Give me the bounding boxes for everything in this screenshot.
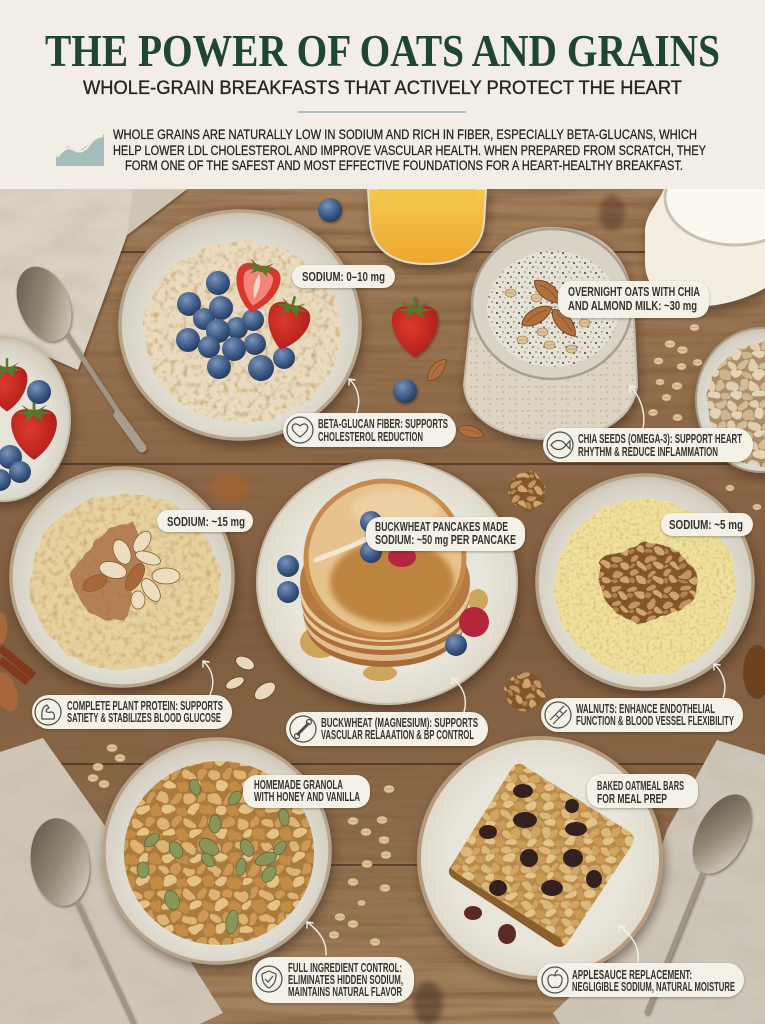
pancake plate bbox=[257, 460, 517, 704]
icon: apple bbox=[542, 967, 568, 993]
callout: baked oatmeal bars bbox=[587, 774, 698, 808]
icon: shield bbox=[256, 966, 282, 992]
callout: homemade granola: WITH HONEY AND VANILLA bbox=[254, 790, 360, 804]
callout: overnight oats: OVERNIGHT OATS WITH CHIA bbox=[568, 285, 700, 299]
callout: beta-glucan: BETA-GLUCAN FIBER: SUPPORTS bbox=[318, 417, 448, 431]
bowl: quinoa with cinnamon and almonds bbox=[11, 468, 233, 686]
callout: sodium porridge: SODIUM: ~5 mg bbox=[669, 518, 743, 532]
bowl: homemade granola bbox=[104, 739, 330, 963]
callout: homemade granola: HOMEMADE GRANOLA bbox=[254, 778, 343, 792]
syrup pools bbox=[300, 589, 488, 681]
callout: full ingredient control: ELIMINATES HIDDEN SODIUM, bbox=[288, 973, 403, 987]
jar: overnight oats with chia bbox=[464, 228, 637, 439]
strawberries bbox=[230, 256, 315, 355]
callout: overnight oats: AND ALMOND MILK: ~30 mg bbox=[568, 299, 697, 313]
cinnamon bbox=[72, 522, 140, 621]
quinoa bbox=[30, 493, 220, 671]
callout: full ingredient control: FULL INGREDIENT CONTROL: bbox=[288, 961, 402, 975]
header panel bbox=[0, 0, 765, 189]
callout: overnight oats bbox=[558, 281, 709, 318]
porridge bbox=[554, 499, 736, 675]
napkin: bottom left bbox=[0, 738, 223, 1024]
callout: applesauce replacement bbox=[537, 963, 744, 997]
callout: complete plant protein: SATIETY & STABILIZES BLOOD GLUCOSE bbox=[67, 711, 221, 725]
icon: blood vessel bbox=[545, 702, 571, 728]
callout: walnuts bbox=[541, 698, 743, 732]
arrows bbox=[203, 379, 725, 962]
callout: buckwheat magnesium bbox=[286, 712, 488, 746]
callout: sodium quinoa: SODIUM: ~15 mg bbox=[167, 515, 245, 529]
icon: flexed arm bbox=[35, 699, 61, 725]
loose strawberry, berries and almonds bbox=[318, 198, 486, 441]
callout: buckwheat magnesium: BUCKWHEAT (MAGNESIUM): SUPPORTS bbox=[321, 716, 478, 730]
callout: applesauce replacement: APPLESAUCE REPLACEMENT: bbox=[572, 968, 692, 982]
callout: sodium quinoa bbox=[157, 510, 253, 532]
syrup bbox=[330, 540, 454, 624]
bowl: porridge with walnuts bbox=[537, 475, 753, 689]
callout: baked oatmeal bars: FOR MEAL PREP bbox=[597, 792, 667, 806]
oatmeal bar bbox=[448, 764, 634, 947]
callout: sodium porridge bbox=[661, 513, 753, 536]
oatmeal bbox=[143, 241, 341, 423]
callout: chia seeds bbox=[543, 428, 753, 462]
callout: beta-glucan: CHOLESTEROL REDUCTION bbox=[318, 430, 423, 444]
callout: baked oatmeal bars: BAKED OATMEAL BARS bbox=[597, 779, 684, 793]
callout: buckwheat pancakes: SODIUM: ~50 mg PER PANCAKE bbox=[375, 533, 516, 547]
berries on pancakes bbox=[277, 511, 489, 656]
icon: fish bbox=[547, 432, 573, 458]
icon: bone bbox=[290, 716, 316, 742]
icon: heart bbox=[287, 417, 313, 443]
pancake stack bbox=[300, 481, 470, 667]
icon: rising heart health chart bbox=[56, 134, 104, 166]
pumpkin seeds bbox=[137, 778, 290, 935]
chia pudding bbox=[487, 251, 619, 367]
callout: buckwheat magnesium: VASCULAR RELAAATION & BP CONTROL bbox=[321, 728, 474, 742]
raisins bbox=[464, 784, 602, 944]
scattered oats, walnuts and almonds bbox=[0, 471, 765, 946]
granola bbox=[124, 761, 314, 945]
intro text bbox=[113, 127, 706, 173]
spoon: top left bbox=[6, 258, 142, 448]
callout: full ingredient control: MAINTAINS NATURAL FLAVOR bbox=[288, 985, 402, 999]
blueberries bbox=[176, 271, 295, 381]
scattered oats, top right bbox=[648, 324, 761, 510]
callout: complete plant protein bbox=[32, 695, 232, 729]
callout: complete plant protein: COMPLETE PLANT PROTEIN: SUPPORTS bbox=[67, 699, 223, 713]
napkin: bottom right bbox=[553, 740, 765, 1024]
callout: full ingredient control bbox=[252, 957, 414, 1003]
plate: baked oatmeal bar bbox=[419, 738, 661, 978]
bowl: rolled oats, right edge bbox=[696, 328, 765, 472]
spoon: bottom right bbox=[647, 785, 763, 1012]
callout: buckwheat pancakes: BUCKWHEAT PANCAKES MADE bbox=[375, 520, 508, 534]
orange juice glass bbox=[368, 189, 486, 264]
callout: beta-glucan bbox=[283, 413, 456, 447]
milk jar bbox=[645, 151, 765, 306]
bowl: strawberries and blueberries, left edge bbox=[0, 337, 70, 501]
napkin: top left bbox=[0, 189, 187, 370]
spoon: bottom left bbox=[25, 814, 134, 1024]
subtitle: WHOLE-GRAIN BREAKFASTS THAT ACTIVELY PROTECT THE HEART bbox=[83, 77, 682, 99]
almond slices bbox=[80, 528, 180, 609]
walnuts bbox=[598, 543, 697, 622]
bowl: oatmeal with berries bbox=[120, 211, 360, 439]
callout: sodium oatmeal: SODIUM: 0–10 mg bbox=[302, 270, 385, 284]
callout: sodium oatmeal bbox=[292, 265, 395, 288]
callout: buckwheat pancakes bbox=[366, 517, 525, 551]
callout: homemade granola bbox=[243, 775, 370, 808]
